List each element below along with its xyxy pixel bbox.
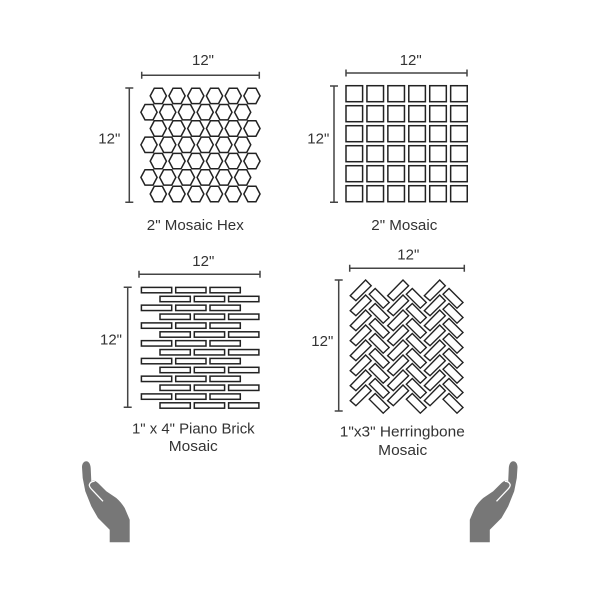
caption: 2 inch mosaic hex: 2" Mosaic Hex xyxy=(147,217,244,234)
panel: herringbone mosaic xyxy=(311,246,465,459)
dimension arrow: hex height xyxy=(125,88,133,202)
dimension label: square height: 12" xyxy=(307,130,329,148)
dimension arrow: brick width xyxy=(139,271,260,278)
caption: herringbone mosaic: Mosaic xyxy=(378,442,428,459)
dimension arrow: herringbone height xyxy=(335,280,343,411)
caption: 2 inch mosaic: 2" Mosaic xyxy=(371,217,438,234)
panel: piano brick mosaic xyxy=(100,253,260,455)
icon: right hand xyxy=(470,461,518,542)
dimension label: brick width: 12" xyxy=(192,253,214,270)
dimension label: herringbone height: 12" xyxy=(311,333,333,350)
hexagon tile sheet xyxy=(141,88,260,202)
dimension label: hex width: 12" xyxy=(192,52,214,69)
panel: 2 inch mosaic xyxy=(307,52,467,234)
dimension arrow: herringbone width xyxy=(350,265,464,272)
dimension arrow: hex width xyxy=(142,72,259,79)
dimension label: brick height: 12" xyxy=(100,332,122,348)
caption: herringbone mosaic: 1"x3" Herringbone xyxy=(340,424,465,441)
caption: herringbone mosaic xyxy=(340,424,465,459)
caption: piano brick mosaic: Mosaic xyxy=(169,438,218,455)
icon: left hand xyxy=(82,461,130,542)
piano brick tile sheet xyxy=(141,287,259,408)
square tile sheet xyxy=(346,86,467,202)
caption: piano brick mosaic xyxy=(132,420,255,455)
dimension arrow: square height xyxy=(330,86,338,202)
dimension label: square width: 12" xyxy=(400,52,422,69)
dimension label: hex height: 12" xyxy=(98,130,120,148)
dimension arrow: square width xyxy=(346,70,467,76)
panel: 2 inch mosaic hex xyxy=(98,52,260,234)
dimension arrow: brick height xyxy=(124,287,132,407)
caption: piano brick mosaic: 1" x 4" Piano Brick xyxy=(132,420,255,437)
dimension label: herringbone width: 12" xyxy=(397,246,419,264)
herringbone tile sheet xyxy=(350,280,463,413)
